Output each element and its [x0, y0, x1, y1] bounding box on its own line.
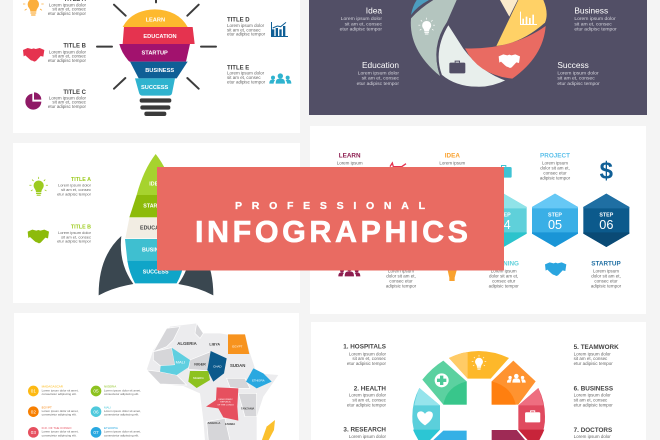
- text: title A: etur adipisc tempor: [48, 11, 86, 16]
- text: business: [574, 386, 613, 408]
- icon: white bulb: [418, 18, 435, 35]
- text: title C: Lorem ipsum dolor: [49, 95, 87, 100]
- text: business: 6. BUSINESS: [574, 386, 613, 393]
- bulb segment: success: [135, 78, 175, 96]
- text: hospitals: Lorem ipsum dolor: [349, 351, 387, 356]
- panel: rocket infographic: [13, 143, 300, 303]
- rocket wing right: [178, 236, 213, 295]
- legend item 01: Lorem ipsum dolor sit amet,: [42, 388, 79, 392]
- text: doctors: 7. DOCTORS: [574, 427, 612, 434]
- text: training: Lorem ipsum: [491, 268, 517, 273]
- bulb segment: business: BUSINESS: [145, 68, 174, 74]
- legend item 06: 06: [93, 409, 99, 414]
- rocket band: education: EDUCATION: [140, 225, 171, 231]
- map: country labels: SUDAN: [230, 363, 245, 368]
- legend item 01: [28, 385, 79, 396]
- legend item 05: Lorem ipsum dolor sit amet,: [104, 388, 141, 392]
- text: health: [347, 385, 387, 408]
- text: business: Lorem ipsum dolor: [574, 393, 611, 398]
- text: title A: [48, 0, 87, 16]
- text: title A: Lorem ipsum dolor: [58, 183, 92, 188]
- hexagon: step 04: [481, 194, 527, 247]
- map: country labels: ALGERIA: [177, 341, 198, 346]
- text: title E: Lorem ipsum dolor: [227, 71, 265, 76]
- text: lower column two: consec etur: [389, 278, 413, 283]
- text: education: Education: [362, 60, 399, 70]
- text: success: [557, 60, 600, 87]
- map: DR Congo: [206, 387, 238, 421]
- icon: orange bulb: [448, 270, 457, 281]
- text: title D: TITLE D: [227, 18, 250, 24]
- text: project: PROJECT: [540, 153, 570, 160]
- text: title C: sit am et, consec: [52, 100, 87, 105]
- blade: blue: [411, 0, 429, 15]
- bulb segment: learn: [123, 9, 188, 27]
- map: country labels: TANZANIA: [241, 406, 254, 410]
- text: training: dolor sit am et,: [489, 273, 518, 278]
- hexagon: step 05: 05: [548, 218, 562, 232]
- blade: business: [496, 0, 547, 46]
- text: title D: [227, 18, 266, 37]
- bulb segment: business: [130, 62, 188, 78]
- text: business: [574, 5, 617, 33]
- text: title A: [57, 177, 92, 196]
- legend item 02: Lorem ipsum dolor sit amet,: [42, 409, 79, 413]
- text: training: [488, 261, 519, 288]
- text: title B: TITLE B: [63, 44, 87, 50]
- map: darker countries: [147, 323, 257, 440]
- map: DR Congo: OF THE CONGO: [217, 404, 234, 406]
- text: startup: consec etur: [594, 278, 618, 283]
- text: title A: sit am et, consec: [52, 7, 87, 12]
- ring segment: orange team: [492, 361, 536, 405]
- ring segment: green health: [422, 361, 467, 405]
- text: title B: Lorem ipsum dolor: [58, 230, 92, 235]
- text: teamwork: sit am et, consec: [574, 356, 608, 361]
- map: Mali: MALI: [176, 359, 185, 364]
- bulb rays: [97, 0, 216, 89]
- legend item 02: EGYPT: [42, 405, 52, 409]
- legend item 07: ETHIOPIA: [104, 426, 118, 430]
- text: title D: Lorem ipsum dolor: [227, 23, 265, 28]
- icon: purple pie: [25, 92, 41, 110]
- text: health: Lorem ipsum dolor: [349, 393, 387, 398]
- text: project: consec etur: [543, 170, 567, 175]
- icon: blue bar chart: [271, 22, 288, 37]
- banner: professional infographics: [157, 167, 504, 270]
- text: title B: sit am et, consec: [52, 54, 87, 59]
- text: title E: TITLE E: [227, 66, 249, 72]
- text: startup: Lorem ipsum: [593, 268, 619, 273]
- text: business: Business: [574, 5, 608, 15]
- bulb base: [140, 98, 171, 116]
- legend item 06: MALI: [104, 405, 111, 409]
- text: title C: TITLE C: [63, 90, 87, 96]
- blade: success: [465, 26, 546, 79]
- map: country labels: LIBYA: [209, 343, 220, 347]
- map: Chad: CHAD: [213, 364, 222, 368]
- blade: cream: [500, 0, 518, 17]
- text: health: sit am et, consec: [352, 398, 387, 403]
- text: title B: Lorem ipsum dolor: [49, 49, 87, 54]
- bulb segment: startup: STARTUP: [142, 51, 168, 57]
- text: hospitals: 1. HOSPITALS: [343, 344, 386, 351]
- legend item 01: consectetur adipiscing elit.: [42, 392, 77, 396]
- text: title D: etur adipisc tempor: [227, 32, 266, 37]
- text: success: Lorem ipsum dolor: [557, 71, 599, 77]
- map: Chad: [207, 351, 227, 382]
- text: lower column two: Lorem ipsum: [388, 268, 414, 273]
- legend item 05: [91, 385, 141, 396]
- text: title A: etur adipisc tempor: [57, 191, 92, 196]
- map: Madagascar: [262, 420, 275, 440]
- text: learn: LEARN: [339, 153, 361, 160]
- text: project: dolor sit am et,: [540, 165, 570, 170]
- text: teamwork: [574, 344, 619, 366]
- text: teamwork: 5. TEAMWORK: [574, 344, 619, 351]
- legend item 05: consectetur adipiscing elit.: [104, 392, 139, 396]
- blade: idea: [411, 0, 457, 76]
- ring segment: maroon doctors: [492, 430, 525, 440]
- text: project: adipisic tempor: [540, 175, 571, 180]
- legend item 05: 05: [93, 389, 99, 394]
- legend item 03: Lorem ipsum dolor sit amet,: [42, 430, 79, 434]
- rocket band: startup: STARTUP: [143, 204, 168, 210]
- banner title: INFOGRAPHICS: [195, 215, 468, 249]
- text: training: TRAINING: [488, 261, 519, 268]
- bulb segment: success: SUCCESS: [141, 85, 169, 91]
- legend item 07: Lorem ipsum dolor sit amet,: [104, 430, 141, 434]
- rocket band: business: BUSINESS: [142, 248, 170, 254]
- legend item 07: [91, 426, 141, 438]
- text: idea: [340, 5, 382, 33]
- icon: briefcase: [449, 61, 465, 73]
- icon: red handshake: [23, 48, 44, 62]
- text: title E: sit am et, consec: [227, 75, 261, 80]
- text: teamwork: etur adipisic tempor: [574, 361, 613, 366]
- map: Ethiopia: ETHIOPIA: [252, 379, 265, 383]
- text: idea: etur adipisc tempor: [340, 27, 382, 33]
- icon: teal people: [269, 73, 291, 84]
- text: title B: sit am et, consec: [61, 234, 91, 239]
- icon: blue handshake: [545, 262, 566, 276]
- hexagon: step 04: 04: [497, 218, 511, 232]
- text: title D: sit am et, consec: [227, 27, 261, 32]
- text: lower column two: adipisic tempor: [386, 283, 417, 288]
- legend item 03: D.R. OF THE CONGO: [42, 426, 72, 430]
- text: idea: Idea: [366, 5, 382, 15]
- rocket wing left: [99, 236, 133, 295]
- text: title B: etur adipisc tempor: [57, 239, 92, 244]
- text: business: etur adipisic tempor: [574, 403, 613, 408]
- panel: medical cross ring: [311, 322, 646, 440]
- text: doctors: [574, 427, 612, 439]
- legend item 01: MADAGASCAR: [42, 385, 64, 389]
- rocket band: startup: [129, 195, 182, 217]
- text: idea: Lorem ipsum: [439, 160, 466, 165]
- rocket band: business: [125, 239, 187, 261]
- text: lower column two: dolor sit am et,: [386, 273, 416, 278]
- panel: light bulb infographic: [13, 0, 300, 133]
- text: education: sit am et, consec: [362, 76, 399, 82]
- ring segment: yellow idea: [449, 351, 509, 379]
- map: country labels: [177, 341, 254, 426]
- text: project: Lorem ipsum: [542, 160, 568, 165]
- text: title A: sit am et, consec: [61, 187, 91, 192]
- text: business: etur adipisc tempor: [574, 27, 617, 33]
- text: education: etur adipisc tempor: [357, 81, 399, 87]
- text: business: Lorem ipsum dolor: [574, 16, 616, 22]
- legend item 07: 07: [93, 430, 99, 435]
- banner subtitle: PROFESSIONAL: [235, 200, 426, 212]
- map: Nigeria: [188, 371, 210, 388]
- text: title C: etur adipisc tempor: [48, 104, 86, 109]
- text: research: Lorem ipsum dolor: [349, 434, 387, 439]
- text: title B: etur adipisc tempor: [48, 58, 86, 63]
- panel: hexagon steps: [310, 126, 646, 314]
- icon: green bulb: [29, 177, 48, 196]
- text: title B: TITLE B: [71, 224, 91, 230]
- icon: maroon people: [338, 266, 360, 276]
- map: Egypt: [228, 334, 249, 354]
- text: health: etur adipisic tempor: [347, 403, 386, 408]
- legend item 03: consectetur adipiscing elit.: [42, 433, 77, 437]
- map: country labels: NIGER: [194, 363, 206, 367]
- hexagon: step 05: [532, 194, 578, 247]
- text: hospitals: sit am et, consec: [352, 356, 387, 361]
- icon: orange bulb: [23, 0, 44, 16]
- text: idea: IDEA: [445, 153, 460, 160]
- legend item 06: Lorem ipsum dolor sit amet,: [104, 409, 141, 413]
- text: business: sit am et, consec: [574, 398, 608, 403]
- map: Mali: [160, 348, 190, 375]
- legend item 02: consectetur adipiscing elit.: [42, 413, 77, 417]
- hexagon: step 05: STEP: [548, 213, 562, 219]
- map: base land: [147, 323, 278, 440]
- hexagon: step 04: STEP: [497, 213, 511, 219]
- text: idea: sit am et, consec: [345, 21, 382, 27]
- text: training: consec etur: [492, 278, 516, 283]
- icon: red accent: [390, 163, 406, 167]
- map: Egypt: EGYPT: [232, 344, 243, 348]
- text: startup: STARTUP: [591, 261, 621, 268]
- text: startup: dolor sit am et,: [591, 273, 621, 278]
- map: Nigeria: NIGERIA: [193, 376, 204, 380]
- text: success: Success: [557, 60, 589, 70]
- icon: green handshake: [28, 230, 49, 243]
- text: success: sit am et, consec: [557, 76, 595, 82]
- icon: dollar: $: [600, 157, 613, 184]
- legend item 06: consectetur adipiscing elit.: [104, 413, 139, 417]
- rocket band: idea: [137, 154, 175, 195]
- hexagon: step 06: 06: [599, 218, 613, 232]
- bulb segment: education: [123, 27, 195, 44]
- map: Ethiopia: [246, 368, 272, 388]
- text: success: etur adipisc tempor: [557, 81, 600, 87]
- text: teamwork: Lorem ipsum dolor: [574, 351, 611, 356]
- hexagon: step 06: [583, 194, 629, 247]
- text: idea: [439, 153, 466, 165]
- text: training: adipisic tempor: [489, 283, 519, 288]
- map: DR Congo: REPUBLIC: [220, 402, 231, 404]
- rocket band: success: [127, 261, 184, 283]
- hexagon: step 06: STEP: [599, 213, 614, 219]
- text: title E: etur adipisc tempor: [227, 79, 266, 84]
- text: title A: TITLE A: [71, 177, 91, 183]
- map: DR Congo: DEMOCRATIC: [218, 398, 233, 401]
- ring segment: blue research: [433, 431, 467, 440]
- legend item 03: [28, 426, 79, 438]
- text: title A: Lorem ipsum dolor: [49, 2, 87, 7]
- map: country labels: ANGOLA: [208, 421, 221, 425]
- bulb segment: startup: [119, 44, 190, 62]
- legend item 02: [28, 405, 79, 417]
- text: doctors: Lorem ipsum dolor: [574, 434, 611, 439]
- map: country labels: ZAMBIA: [225, 422, 235, 426]
- icon: teal briefcase: [496, 165, 512, 178]
- ring segment: red business: [518, 388, 545, 440]
- panel: shutter cycle on dark background: [309, 0, 647, 115]
- icon: white chart: [520, 12, 537, 25]
- text: education: Lorem ipsum dolor: [358, 71, 399, 77]
- text: project: [540, 153, 571, 180]
- text: lower column two: [386, 268, 417, 288]
- text: title E: [227, 66, 266, 84]
- legend item 07: consectetur adipiscing elit.: [104, 433, 139, 437]
- text: research: 3. RESEARCH: [343, 427, 386, 434]
- panel: Africa map: [14, 313, 299, 440]
- legend item 01: 01: [31, 389, 36, 394]
- legend item 02: 02: [31, 409, 36, 414]
- text: learn: [337, 153, 363, 165]
- legend item 03: 03: [31, 430, 36, 435]
- text: title B: [48, 44, 87, 63]
- text: startup: [591, 261, 622, 288]
- rocket band: education: [125, 218, 187, 238]
- text: hospitals: [343, 344, 387, 366]
- bulb segment: learn: LEARN: [146, 17, 165, 23]
- legend item 05: NIGERIA: [104, 385, 116, 389]
- bulb segment: education: EDUCATION: [143, 34, 177, 40]
- legend item 06: [91, 405, 141, 417]
- text: research: [343, 427, 387, 439]
- icon: white handshake: [499, 54, 520, 68]
- text: title B: [57, 224, 92, 244]
- ring segment: teal heart: [412, 388, 440, 440]
- text: health: 2. HEALTH: [354, 385, 386, 392]
- text: startup: adipisic tempor: [591, 283, 622, 288]
- rocket band: idea: IDEA: [149, 181, 162, 187]
- text: business: sit am et, consec: [574, 21, 612, 27]
- text: learn: Lorem ipsum: [337, 160, 363, 165]
- text: title C: [48, 90, 87, 109]
- text: hospitals: etur adipisic tempor: [347, 361, 386, 366]
- rocket band: success: SUCCESS: [143, 270, 169, 276]
- text: idea: Lorem ipsum dolor: [341, 16, 382, 22]
- blade: education: [438, 23, 508, 88]
- text: education: [357, 60, 399, 87]
